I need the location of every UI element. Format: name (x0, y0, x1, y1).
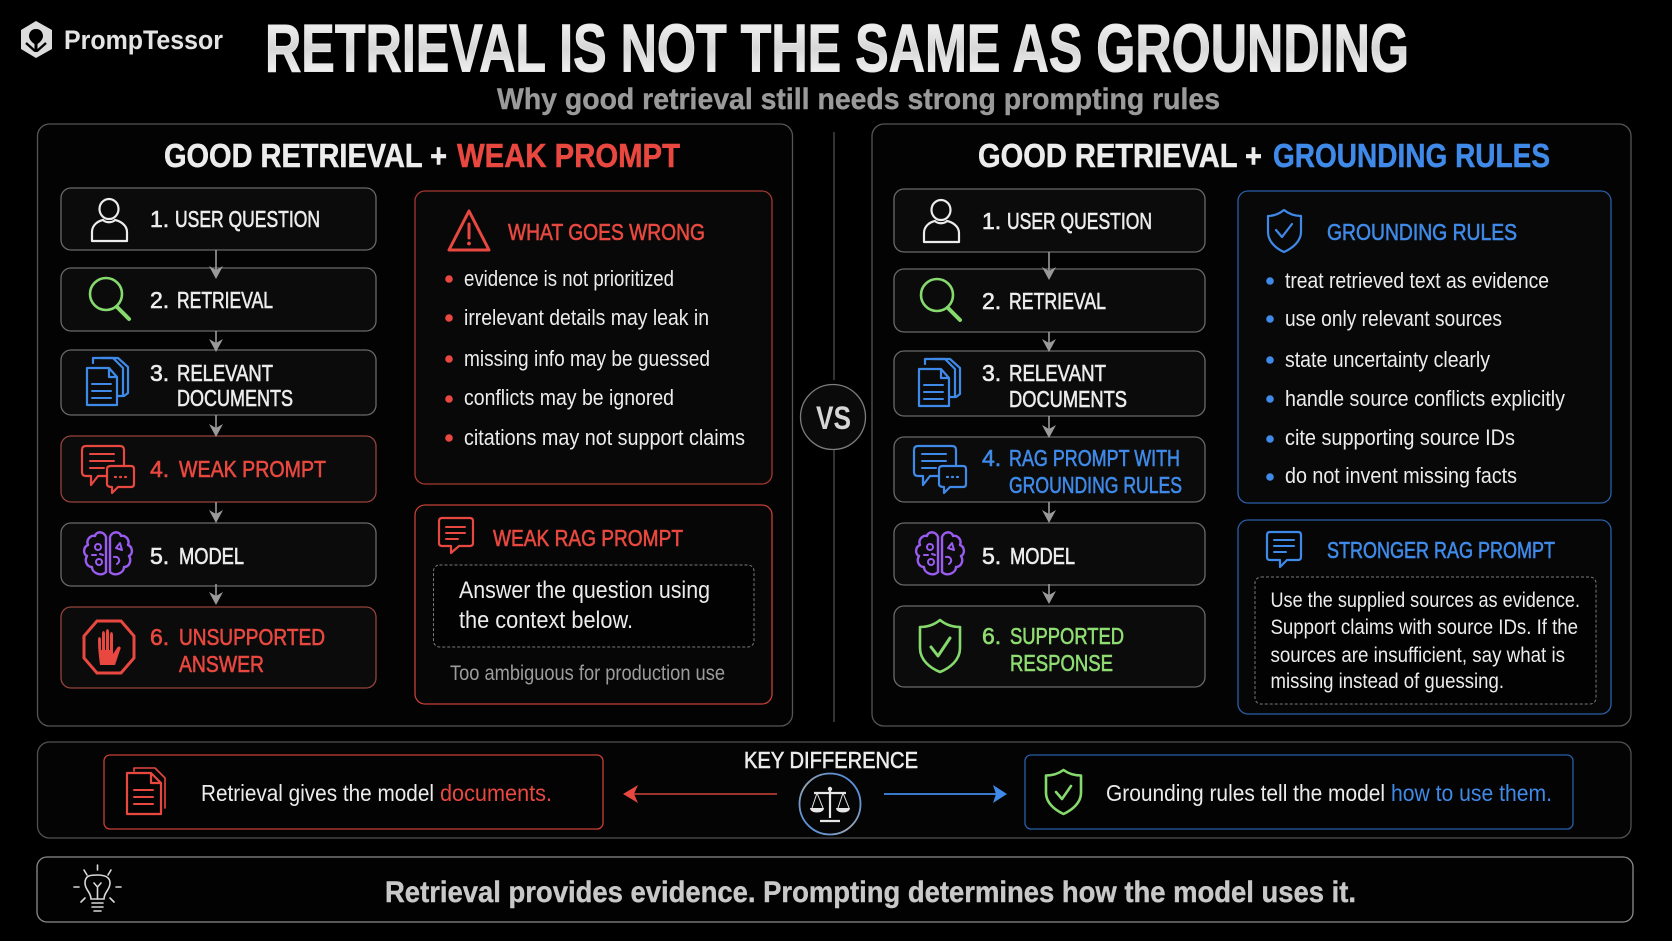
caption: Too ambiguous for production use (450, 662, 725, 685)
panel: grounding rules (872, 124, 1631, 726)
icon: document (127, 768, 165, 814)
icon: speech bubble (439, 518, 473, 553)
step 3: relevant documents: DOCUMENTS (177, 385, 293, 411)
icon: chat bubbles (82, 446, 134, 493)
bullet list: rules (1266, 268, 1565, 488)
card: grounding rules (1238, 191, 1611, 503)
step 4: weak prompt (61, 436, 376, 502)
bullet list: problems (445, 266, 745, 450)
bullet list: problems: missing info may be guessed (464, 346, 710, 371)
icon: warning triangle (449, 211, 489, 250)
icon: green shield (1046, 770, 1081, 814)
step 1: user question: 1. (150, 206, 169, 232)
step 3: relevant documents: 3. (982, 360, 1001, 386)
step 4: rag prompt with grounding rules: GROUNDING RULES (1009, 472, 1182, 498)
logo wordmark: PrompTessor (64, 25, 223, 55)
card: stronger rag prompt (1238, 520, 1611, 714)
icon: search (90, 278, 129, 319)
card: weak rag prompt (415, 505, 772, 704)
step 1: user question: USER QUESTION (175, 206, 320, 232)
bullet list: rules: do not invent missing facts (1285, 463, 1517, 488)
divider and vs badge: VS (816, 400, 851, 436)
arrow (1042, 584, 1056, 604)
step 2: retrieval: RETRIEVAL (177, 287, 273, 313)
step 2: retrieval: 2. (150, 287, 169, 313)
bullet list: rules: handle source conflicts explicitly (1285, 386, 1565, 411)
prompt text box (434, 565, 754, 647)
prompt text box: missing instead of guessing. (1270, 670, 1504, 693)
callout: retrieval: documents. (440, 780, 552, 806)
arrow (209, 331, 223, 352)
step 4: weak prompt: WEAK PROMPT (179, 456, 326, 482)
card: stronger rag prompt: STRONGER RAG PROMPT (1327, 537, 1555, 563)
step 6: unsupported answer: ANSWER (179, 651, 264, 677)
bullet list: rules: treat retrieved text as evidence (1285, 268, 1549, 293)
step 5: model: MODEL (1010, 543, 1075, 569)
icon: blue shield (1268, 210, 1301, 252)
step 3: relevant documents (61, 350, 376, 415)
logo (21, 21, 223, 58)
arrow (209, 584, 223, 605)
card: what goes wrong: WHAT GOES WRONG (508, 219, 705, 245)
callout: retrieval (104, 755, 603, 829)
icon: search (921, 279, 960, 320)
heading: key difference: KEY DIFFERENCE (744, 747, 918, 773)
icon: stop hand (84, 621, 134, 673)
step 5: model (894, 523, 1205, 585)
step 6: supported response (894, 606, 1205, 687)
card: what goes wrong (415, 191, 772, 484)
prompt text box: Answer the question using (459, 577, 710, 604)
heading: weak prompt: WEAK PROMPT (457, 137, 680, 174)
arrow (1042, 332, 1056, 352)
bullet list: problems: evidence is not prioritized (464, 266, 674, 291)
arrow (1042, 416, 1056, 438)
prompt text box (1255, 577, 1596, 704)
step 2: retrieval (61, 268, 376, 331)
arrow: to retrieval (623, 785, 777, 803)
step 6: supported response: RESPONSE (1010, 650, 1113, 676)
callout: grounding (1025, 755, 1573, 829)
icon: green shield (920, 620, 960, 672)
panel: weak prompt (38, 124, 792, 726)
step 4: rag prompt with grounding rules: 4. (982, 445, 1001, 471)
step 2: retrieval (894, 269, 1205, 332)
step 1: user question (894, 189, 1205, 252)
bullet list: rules: cite supporting source IDs (1285, 425, 1515, 450)
step 6: unsupported answer (61, 607, 376, 688)
heading: weak prompt: GOOD RETRIEVAL + (164, 137, 447, 174)
step 6: supported response: 6. (982, 623, 1001, 649)
step 3: relevant documents: RELEVANT (177, 360, 273, 386)
step 3: relevant documents (894, 351, 1205, 416)
step 4: rag prompt with grounding rules: RAG PROMPT WITH (1009, 445, 1180, 471)
prompt text box: sources are insufficient, say what is (1270, 644, 1565, 667)
card: grounding rules: GROUNDING RULES (1327, 219, 1517, 245)
step 3: relevant documents: 3. (150, 360, 169, 386)
icon: user (92, 199, 127, 241)
icon: balance scale (800, 774, 860, 834)
icon: user (924, 200, 959, 242)
prompt text box: Support claims with source IDs. If the (1270, 616, 1578, 639)
panel: key difference (38, 742, 1631, 838)
step 4: rag prompt with grounding rules (894, 437, 1205, 502)
step 1: user question: 1. (982, 208, 1001, 234)
callout: grounding: Grounding rules tell the model (1106, 780, 1385, 806)
arrow (209, 250, 223, 279)
prompt text box: the context below. (459, 607, 633, 634)
step 2: retrieval: RETRIEVAL (1009, 288, 1106, 314)
icon: logo hexagon (21, 21, 52, 58)
step 1: user question: USER QUESTION (1007, 208, 1152, 234)
arrow (1042, 502, 1056, 523)
icon: brain (916, 532, 964, 574)
step 6: supported response: SUPPORTED (1010, 623, 1124, 649)
bullet list: rules: state uncertainty clearly (1285, 347, 1490, 372)
heading: grounding rules (978, 137, 1550, 174)
step 5: model: MODEL (179, 543, 244, 569)
prompt text box: Use the supplied sources as evidence. (1270, 589, 1580, 612)
arrow (209, 415, 223, 437)
step 3: relevant documents: RELEVANT (1009, 360, 1106, 386)
bullet list: problems: conflicts may be ignored (464, 385, 674, 410)
takeaway text: Retrieval provides evidence. Prompting determines how the model uses it. (385, 876, 1356, 909)
step 5: model: 5. (150, 543, 169, 569)
divider and vs badge (800, 132, 866, 722)
step 4: weak prompt: 4. (150, 456, 169, 482)
heading: weak prompt (164, 137, 680, 174)
icon: speech bubble (1267, 532, 1301, 567)
callout: grounding: how to use them. (1391, 780, 1552, 806)
arrow: to grounding (884, 785, 1007, 803)
subtitle: Why good retrieval still needs strong prompting rules (497, 83, 1220, 116)
step 3: relevant documents: DOCUMENTS (1009, 386, 1127, 412)
bullet list: problems: irrelevant details may leak in (464, 305, 709, 330)
bullet list: problems: citations may not support claims (464, 425, 745, 450)
step 1: user question (61, 188, 376, 250)
arrow (209, 502, 223, 523)
step 2: retrieval: 2. (982, 288, 1001, 314)
bullet list: rules: use only relevant sources (1285, 306, 1502, 331)
heading: grounding rules: GOOD RETRIEVAL + (978, 137, 1262, 174)
icon: chat bubbles (914, 446, 966, 493)
card: weak rag prompt: WEAK RAG PROMPT (493, 525, 683, 551)
heading: grounding rules: GROUNDING RULES (1273, 137, 1550, 174)
step 6: unsupported answer: 6. (150, 624, 169, 650)
icon: light bulb (74, 865, 121, 911)
step 6: unsupported answer: UNSUPPORTED (179, 624, 325, 650)
step 5: model (61, 523, 376, 586)
callout: retrieval: Retrieval gives the model (201, 780, 434, 806)
step 5: model: 5. (982, 543, 1001, 569)
icon: brain (84, 532, 132, 574)
icon: documents (87, 358, 128, 405)
icon: documents (919, 359, 960, 406)
panel: takeaway (37, 857, 1633, 922)
arrow (1042, 252, 1056, 280)
